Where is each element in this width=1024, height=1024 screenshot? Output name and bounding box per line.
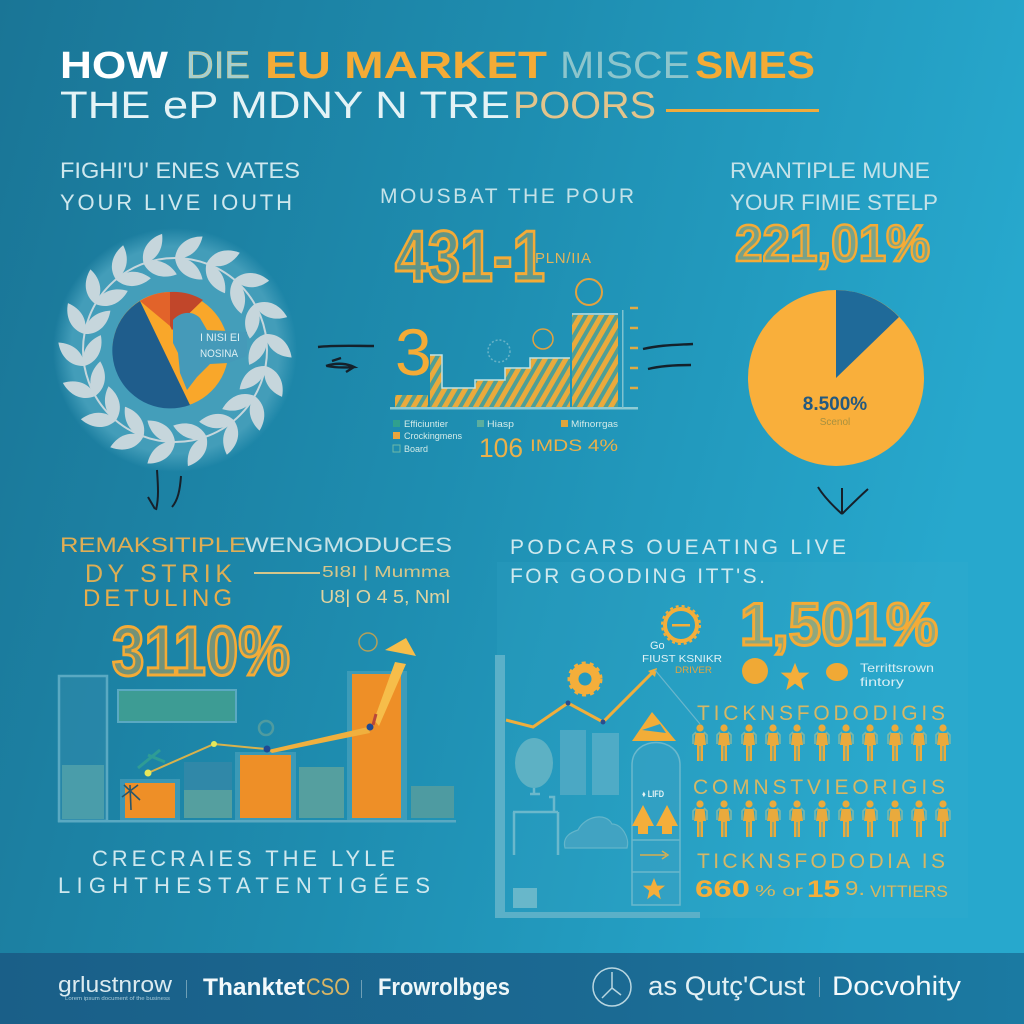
logo: brand one: grlustnrow [58,972,172,997]
title: HOW [60,45,168,87]
illustration: growth scene: DRIVER [675,665,713,675]
panel: left intro text: FIGHI'U' ENES VATES [60,158,300,183]
illustration: growth scene: ♦ LIFD [642,789,664,799]
logo: brand three: Frowrolbges [378,974,510,1001]
icons and note: fintory [860,675,904,689]
big number: right: 221,01% [735,215,930,273]
panel: left intro text: YOUR LIVE IOUTH [60,190,292,215]
arrow: below pie [818,487,868,514]
title: SMES [695,45,815,87]
heading: center: MOUSBAT THE POUR [380,185,634,208]
icon: clock logo [593,968,631,1006]
caption: bottom left: CRECRAIES THE LYLE [92,846,395,871]
row label 1: TICKNSFODODIGIS [697,702,945,725]
panel: left intro text [60,158,300,215]
illustration: growth scene: FIUST KSNIKR [642,653,722,665]
icons and note [742,658,934,690]
logo: brand four: Docvohity [832,971,962,1001]
logo: brand four: as Qutç'Cust [648,971,805,1001]
big number: center: 431-1 [395,217,545,297]
big number: bottom right: 1,501% [740,591,938,658]
logo: brand two: CSO [306,974,350,1001]
people row 1 [693,724,950,761]
stat line: bottom right: VITTIERS [870,882,948,901]
chart legend: Mifnorrgas [571,419,619,429]
small unit text: PLN/IIA [535,250,591,267]
heading: bottom right: PODCARS OUEATING LIVE [510,536,846,559]
panel: right column [730,158,938,466]
icon: wreath with pie and map: NOSINA [200,348,239,360]
heading: bottom left [60,534,452,612]
arrow: center right connector [643,344,693,369]
side stats: bottom left: U8| O 4 5, Nml [320,587,450,607]
chart legend: Efficiuntier [404,419,448,429]
heading: bottom left: DETULING [83,585,232,612]
caption: bottom left: LIGHTHESTATENTIGÉES [58,873,430,898]
heading: right: YOUR FIMIE STELP [730,190,938,215]
big number: bottom left: 3110% [112,612,290,690]
title: THE eP MDNY N TRE [60,85,510,127]
title: POORS [513,85,656,127]
illustration: growth scene [495,606,722,918]
panel: bottom left [58,534,456,898]
heading: right [730,158,938,215]
center stat line: 106 [479,433,523,463]
arrow: below wreath [148,470,181,510]
chart legend [393,419,619,454]
caption: bottom left [58,846,430,898]
panel: center column [380,185,638,463]
side stats: bottom left [254,564,450,607]
center stat line: IMDS 4% [530,436,618,455]
row label 3: TICKNSFODODIA IS [697,850,945,873]
title: MISCE [560,45,690,87]
title: EU MARKET [265,45,547,87]
logo: brand four [648,971,962,1001]
heading: bottom left: DY STRIK [85,560,232,588]
side stats: bottom left: 5I8I | Mumma [322,564,450,581]
center stat line [479,433,618,463]
hatched step chart [390,279,638,410]
logo: brand one: Lorem ipsum document of the business [65,996,171,1002]
chart legend: Board [404,444,428,454]
hatched step chart: 3 [395,315,432,389]
icon: wreath with pie and map [52,227,298,473]
arrow: center left connector [318,346,374,372]
heading: bottom right [510,536,846,588]
icons and note: Territtsrown [860,661,934,675]
logo: brand two [203,974,350,1001]
panel background [497,562,968,918]
heading: right: RVANTIPLE MUNE [730,158,930,183]
stat line: bottom right: 660 [695,876,750,903]
people row 2 [693,800,950,837]
pie chart: right: 8.500% [803,394,867,415]
chart legend: Crockingmens [404,431,462,441]
pie chart: right [748,290,924,466]
footer [0,953,1024,1024]
bar chart with trend arrow [58,633,456,822]
pie chart: right: Scenol [820,417,850,428]
heading: bottom left: REMAKSITIPLE [60,534,246,557]
title [60,45,819,127]
title: DIE [186,45,250,87]
heading: bottom right: FOR GOODING ITT'S. [510,565,765,588]
chart legend: Hiasp [487,419,514,429]
stat line: bottom right: % or [755,883,804,900]
illustration: growth scene: Go [650,640,665,652]
stat line: bottom right: 15 [807,876,840,903]
heading: bottom left: WENGMODUCES [245,534,452,557]
panel: bottom right [495,536,968,918]
stat line: bottom right [695,876,948,903]
row label 2: COMNSTVIEORIGIS [693,776,945,799]
icon: wreath with pie and map: I NISI EI [200,332,240,344]
stat line: bottom right: 9. [845,878,865,900]
logo: brand two: Thanktet [203,974,305,1001]
